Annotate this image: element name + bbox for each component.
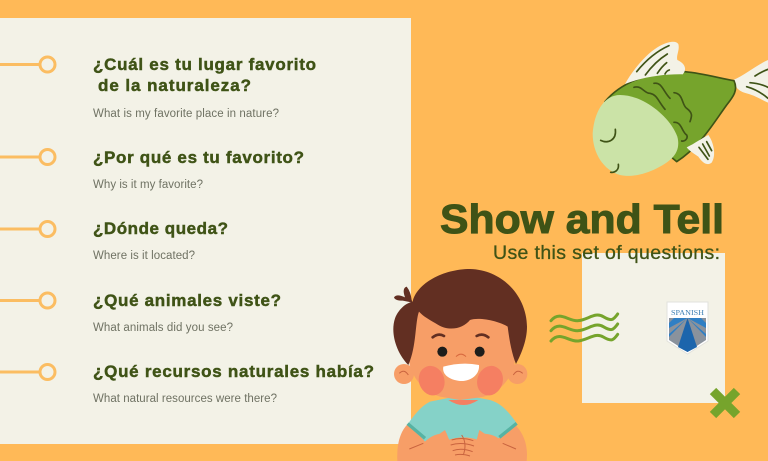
panel: logo card: [582, 253, 725, 403]
question 3: [0, 219, 228, 262]
eyes: [437, 347, 447, 357]
face: [408, 310, 515, 400]
shirt: [408, 395, 517, 442]
eyebrows: [433, 335, 488, 337]
logo: Spanish academy shield: [667, 302, 708, 354]
question 1: What is my favorite place in nature?: [93, 108, 279, 120]
question 2: [0, 148, 304, 191]
nose: [456, 354, 466, 357]
question 4: [0, 291, 281, 334]
question 2: Why is it my favorite?: [93, 179, 203, 191]
icon: green cross: [713, 391, 737, 415]
icon: fish: [593, 42, 768, 176]
smile: [443, 364, 479, 381]
question 5: What natural resources were there?: [93, 393, 277, 405]
question 4: ¿Qué animales viste?: [93, 291, 281, 310]
illustration: smiling boy: [393, 269, 527, 461]
question 4: What animals did you see?: [93, 322, 233, 334]
subtitle: Use this set of questions:: [493, 242, 720, 264]
arms: [397, 423, 527, 461]
title: Show and Tell: [440, 196, 724, 242]
question 5: ¿Qué recursos naturales había?: [93, 362, 374, 381]
neck: [448, 400, 478, 405]
question 2: ¿Por qué es tu favorito?: [93, 148, 304, 167]
logo: Spanish academy shield: SPANISH: [671, 308, 705, 317]
ears: [394, 364, 414, 384]
cheeks: [415, 362, 449, 399]
panel: questions: [0, 18, 411, 444]
question 1: ¿Cuál es tu lugar favorito: [93, 55, 316, 74]
question 3: ¿Dónde queda?: [93, 219, 228, 238]
hair: [393, 269, 527, 365]
question 1: de la naturaleza?: [98, 76, 251, 95]
question 3: Where is it located?: [93, 250, 195, 262]
icon: wavy lines: [551, 314, 618, 341]
hands: [423, 430, 503, 461]
question 5: [0, 362, 374, 405]
question 1: [0, 55, 316, 120]
